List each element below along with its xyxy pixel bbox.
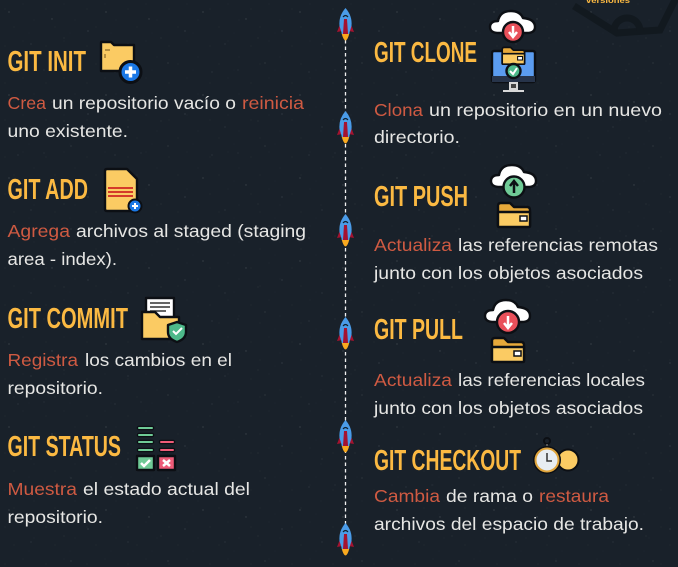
heading: git add: GIT ADD: [8, 174, 88, 206]
description: git clone: directorio.: [374, 127, 460, 147]
icon: cloud download and folder: [485, 300, 530, 362]
description: git add: archivos al staged (staging: [76, 221, 306, 241]
description: git commit: los cambios en el: [85, 350, 232, 370]
description: git push: [373, 235, 658, 283]
description: git status: el estado actual del: [83, 479, 250, 499]
heading: git clone: GIT CLONE: [374, 37, 477, 69]
rockets on timeline: [337, 8, 354, 556]
panel: git status: [8, 428, 250, 527]
description: git init: uno existente.: [8, 121, 128, 141]
heading: git pull: GIT PULL: [374, 314, 463, 346]
description: git pull: las referencias locales: [458, 370, 645, 390]
heading: git status: GIT STATUS: [8, 431, 121, 463]
description: git pull: [373, 370, 645, 418]
description: git push: las referencias remotas: [458, 235, 658, 255]
icon: cloud upload and folder: [491, 165, 536, 227]
timeline dashed line: [344, 40, 346, 526]
description: git clone: [374, 100, 662, 147]
hexagon decoration with versiones label: [574, 0, 676, 33]
description: git checkout: Cambia: [374, 486, 440, 506]
icon: folder plus: [101, 42, 141, 82]
panel: git checkout: [374, 438, 644, 534]
description: git add: [8, 221, 306, 269]
heading: git init: GIT INIT: [8, 46, 86, 78]
description: git status: [8, 479, 250, 527]
description: git pull: Actualiza: [374, 370, 452, 390]
icon: document plus: [105, 169, 142, 212]
description: git push: junto con los objetos asociados: [373, 263, 643, 283]
description: git checkout: de rama o: [446, 486, 533, 506]
description: git add: area - index).: [8, 249, 117, 269]
panel: git add: [8, 169, 306, 269]
description: git checkout: [374, 486, 644, 534]
icon: stopwatch: [533, 438, 578, 474]
description: git init: [8, 93, 304, 141]
heading: git push: GIT PUSH: [374, 181, 468, 213]
description: git checkout: archivos del espacio de trabajo.: [374, 514, 644, 534]
heading: git commit: GIT COMMIT: [8, 303, 128, 335]
description: git commit: [8, 350, 232, 398]
icon: cloud download to monitor: [490, 11, 535, 91]
panel: git init: [8, 42, 304, 141]
description: git init: un repositorio vacío o: [52, 93, 236, 113]
description: git commit: repositorio.: [8, 378, 103, 398]
panel: git pull: [373, 300, 645, 418]
description: git pull: junto con los objetos asociados: [373, 398, 643, 418]
description: git status: repositorio.: [8, 507, 103, 527]
description: git checkout: restaura: [539, 486, 609, 506]
description: git init: reinicia: [242, 93, 304, 113]
description: git push: Actualiza: [374, 235, 452, 255]
description: git status: Muestra: [8, 479, 77, 499]
description: git commit: Registra: [8, 350, 78, 370]
panel: git clone: [374, 11, 662, 147]
icon: status check and cross: [137, 428, 175, 470]
description: git clone: Clona: [374, 100, 423, 120]
icon: folder with shield: [142, 298, 186, 342]
heading: git checkout: GIT CHECKOUT: [374, 445, 521, 477]
description: git init: Crea: [8, 93, 46, 113]
description: git clone: un repositorio en un nuevo: [429, 100, 662, 120]
description: git add: Agrega: [8, 221, 70, 241]
panel: git push: [373, 165, 658, 283]
panel: git commit: [8, 298, 232, 398]
